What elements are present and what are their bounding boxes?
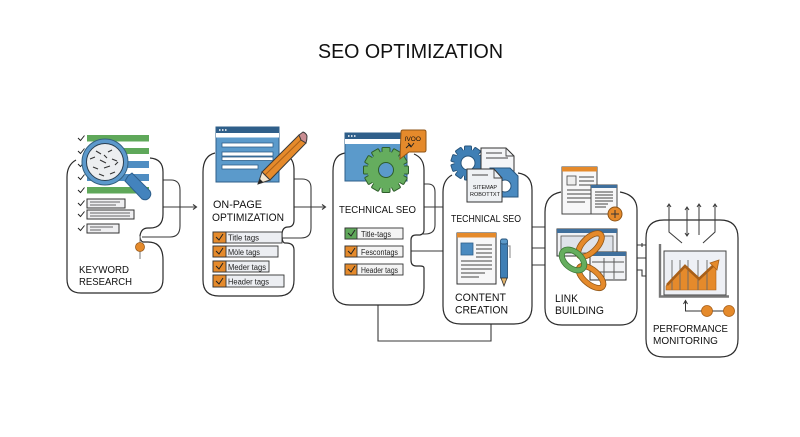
connector lines between panels — [142, 179, 646, 341]
icon: orange speech badge: ſVOO — [405, 136, 421, 143]
icon: pen — [500, 239, 510, 286]
panel: keyword research — [67, 135, 163, 293]
icon: gears and documents: SITEMAP — [473, 185, 497, 191]
checklist: on-page tags: Title tags — [228, 234, 259, 242]
icon: browser with gear — [345, 133, 408, 192]
icon: browser window — [216, 127, 279, 182]
icon: gears and documents — [451, 146, 518, 202]
icon: keyword checklist — [78, 135, 149, 233]
icon: performance chart — [660, 244, 729, 296]
panel outline — [333, 153, 424, 305]
icon: documents with plus — [562, 167, 622, 221]
checklist: on-page tags: Mòle tags — [228, 248, 260, 257]
heading: on-page optimization: ON-PAGE — [213, 199, 262, 211]
icon: content document — [457, 233, 496, 284]
panel outline — [545, 192, 637, 325]
panel: technical seo and content creation — [443, 146, 532, 324]
label: link building: BUILDING — [555, 305, 604, 317]
label: keyword research — [79, 264, 132, 288]
icon: chain links — [558, 229, 607, 292]
label: performance monitoring: PERFORMANCE — [653, 324, 728, 335]
panel outline — [67, 158, 163, 293]
label: content creation — [455, 292, 508, 316]
checklist: technical tags: Fescontags — [361, 248, 398, 257]
checklist: on-page tags: Header tags — [228, 278, 269, 286]
label: keyword research: RESEARCH — [79, 276, 132, 288]
panel: performance monitoring — [646, 204, 738, 357]
panel outline — [443, 173, 532, 324]
heading: technical seo: TECHNICAL SEO — [339, 204, 416, 216]
checklist: technical tags: Title-tags — [361, 230, 391, 239]
label: keyword research: KEYWORD — [79, 264, 129, 276]
icon: magnifying glass — [82, 139, 151, 200]
icon: timeline dots — [684, 300, 734, 316]
label: performance monitoring — [653, 324, 728, 347]
checklist: technical tags — [345, 228, 403, 275]
panel: on-page optimization — [203, 127, 307, 296]
heading: on-page optimization — [212, 199, 284, 224]
title: SEO OPTIMIZATION — [318, 41, 503, 63]
checklist: technical tags: Header tags — [361, 266, 398, 275]
label: content creation: CONTENT — [455, 292, 506, 304]
panel: technical seo — [333, 130, 426, 305]
icon: browser windows — [557, 229, 626, 280]
icon: pencil — [258, 132, 307, 184]
label: link building — [555, 293, 604, 317]
icon: output arrows — [667, 204, 717, 243]
label: link building: LINK — [555, 293, 579, 305]
panel outline — [646, 220, 738, 357]
panel outline — [203, 153, 294, 296]
icon: gears and documents: ROBOTTXT — [470, 192, 501, 198]
checklist: on-page tags: Meder tags — [228, 263, 266, 272]
checklist: on-page tags — [213, 232, 284, 287]
label: performance monitoring: MONITORING — [653, 336, 718, 347]
panel: link building — [545, 167, 637, 325]
heading: on-page optimization: OPTIMIZATION — [212, 212, 284, 224]
icon: orange pin — [136, 236, 144, 259]
label: content creation: CREATION — [455, 304, 508, 316]
heading: technical seo: TECHNICAL SEO — [451, 214, 521, 225]
icon: orange speech badge — [400, 130, 426, 159]
